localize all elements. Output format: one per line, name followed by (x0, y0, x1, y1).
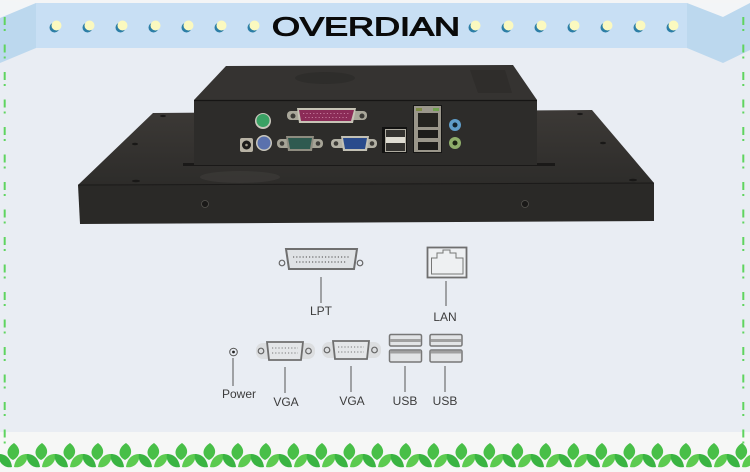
diagram: VGA left: VGA (273, 395, 299, 409)
diagram: Power: Power (222, 387, 256, 401)
diagram: VGA right (322, 341, 381, 408)
title: OVERDIAN (272, 12, 460, 42)
diagram: Power (222, 348, 256, 401)
port: audio blue (449, 119, 461, 131)
ribbon banner (0, 0, 750, 63)
diagram: VGA right: VGA (339, 394, 365, 408)
monitor screws (202, 200, 528, 208)
diagram: LPT: LPT (310, 304, 333, 318)
port: parallel LPT (287, 108, 367, 123)
port: PS/2 blue (256, 135, 272, 151)
port: LAN and USB stack (413, 105, 442, 153)
diagram: LPT (279, 249, 363, 318)
left green dashed border (4, 17, 6, 446)
leaf border (0, 443, 750, 467)
port: PS/2 green (255, 113, 271, 129)
banner dots right (468, 20, 678, 32)
diagram: USB left (390, 334, 422, 408)
diagram: USB right (430, 334, 462, 408)
port: serial (277, 136, 323, 151)
port: VGA (331, 136, 377, 151)
diagram: VGA left (256, 342, 315, 409)
diagram: USB left: USB (393, 394, 417, 408)
port: audio green (449, 137, 461, 149)
diagram: LAN (428, 248, 466, 324)
diagram: USB right: USB (433, 394, 457, 408)
port: power jack (240, 138, 253, 152)
right green dashed border (742, 17, 744, 446)
banner dots left (50, 20, 260, 32)
control box (194, 65, 537, 165)
port: dual USB (382, 127, 407, 153)
diagram: LAN: LAN (433, 310, 457, 324)
monitor rear panel (78, 110, 654, 224)
